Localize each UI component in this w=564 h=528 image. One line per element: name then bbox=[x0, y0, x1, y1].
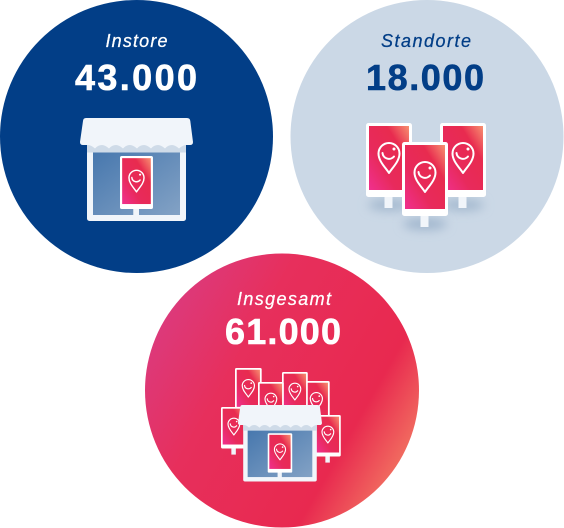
label: Instore: Instore bbox=[106, 31, 168, 51]
panel: Instore bbox=[0, 0, 273, 273]
circle: Insgesamt background bbox=[145, 254, 419, 528]
icon: three outdoor displays bbox=[366, 123, 486, 230]
panel: Standorte bbox=[290, 0, 564, 273]
number: 61.000: 61.000 bbox=[225, 311, 341, 352]
circle: Standorte background bbox=[290, 0, 564, 273]
circle: Instore background bbox=[0, 0, 273, 273]
icon: store surrounded by displays bbox=[221, 368, 341, 482]
label: Insgesamt: Insgesamt bbox=[237, 289, 332, 309]
label: Standorte: Standorte bbox=[381, 31, 471, 51]
panel: Insgesamt bbox=[145, 254, 419, 528]
icon: storefront with display bbox=[80, 118, 193, 221]
number: 18.000: 18.000 bbox=[366, 57, 484, 98]
number: 43.000: 43.000 bbox=[75, 57, 197, 98]
